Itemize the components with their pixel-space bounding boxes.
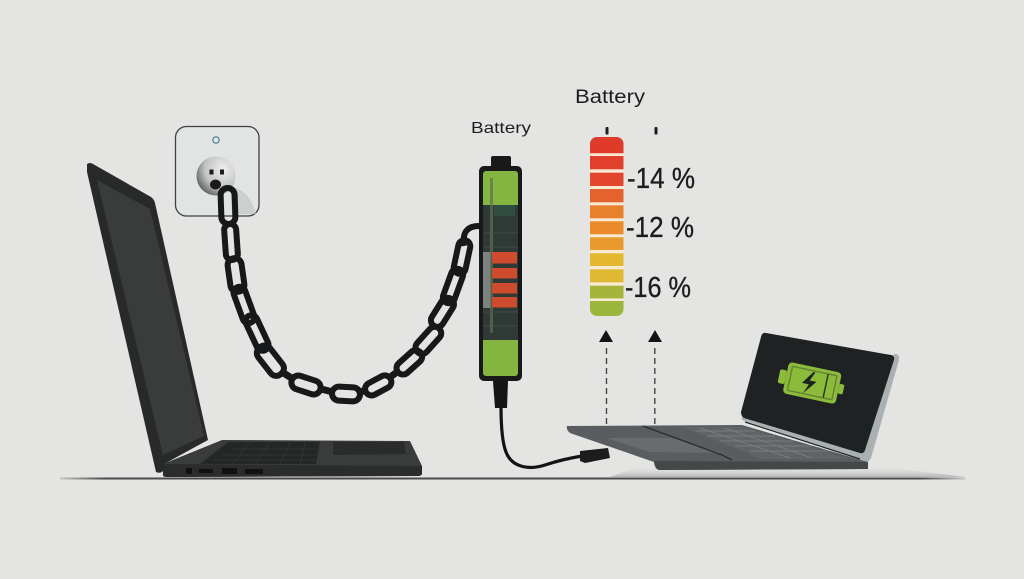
strain relief: [493, 381, 508, 408]
battery pack: [479, 156, 522, 408]
percentage labels: -12 %: [626, 212, 694, 244]
top ticks: [606, 127, 658, 134]
green cells: [483, 171, 518, 376]
keyboard: [683, 427, 850, 459]
laptop lid: [87, 163, 208, 473]
surface shadow: [610, 466, 965, 477]
touchpad: [606, 438, 722, 453]
percentage labels: [625, 163, 695, 304]
label: battery (left): Battery: [471, 120, 531, 137]
wall socket: [176, 126, 259, 216]
percentage labels: -16 %: [625, 272, 691, 304]
red cells: [492, 252, 517, 308]
icon: battery charging: [776, 360, 847, 405]
chain from socket to battery: [220, 188, 479, 402]
lid screen: [741, 333, 894, 453]
arrow: right dashed up: [648, 330, 662, 425]
lid edge: [742, 354, 899, 462]
laptop: right, folded open: [567, 333, 965, 477]
dark cells: [483, 178, 518, 340]
charging cable: [501, 406, 610, 467]
arrow: left dashed up: [599, 330, 613, 425]
laptop base: [163, 440, 422, 477]
ground line: [60, 478, 965, 480]
percentage labels: -14 %: [627, 163, 695, 195]
plug: [580, 448, 610, 463]
base: [567, 425, 868, 470]
laptop: left, open: [87, 163, 422, 477]
battery level gauge: [590, 137, 624, 316]
label: battery (right): Battery: [575, 87, 646, 108]
